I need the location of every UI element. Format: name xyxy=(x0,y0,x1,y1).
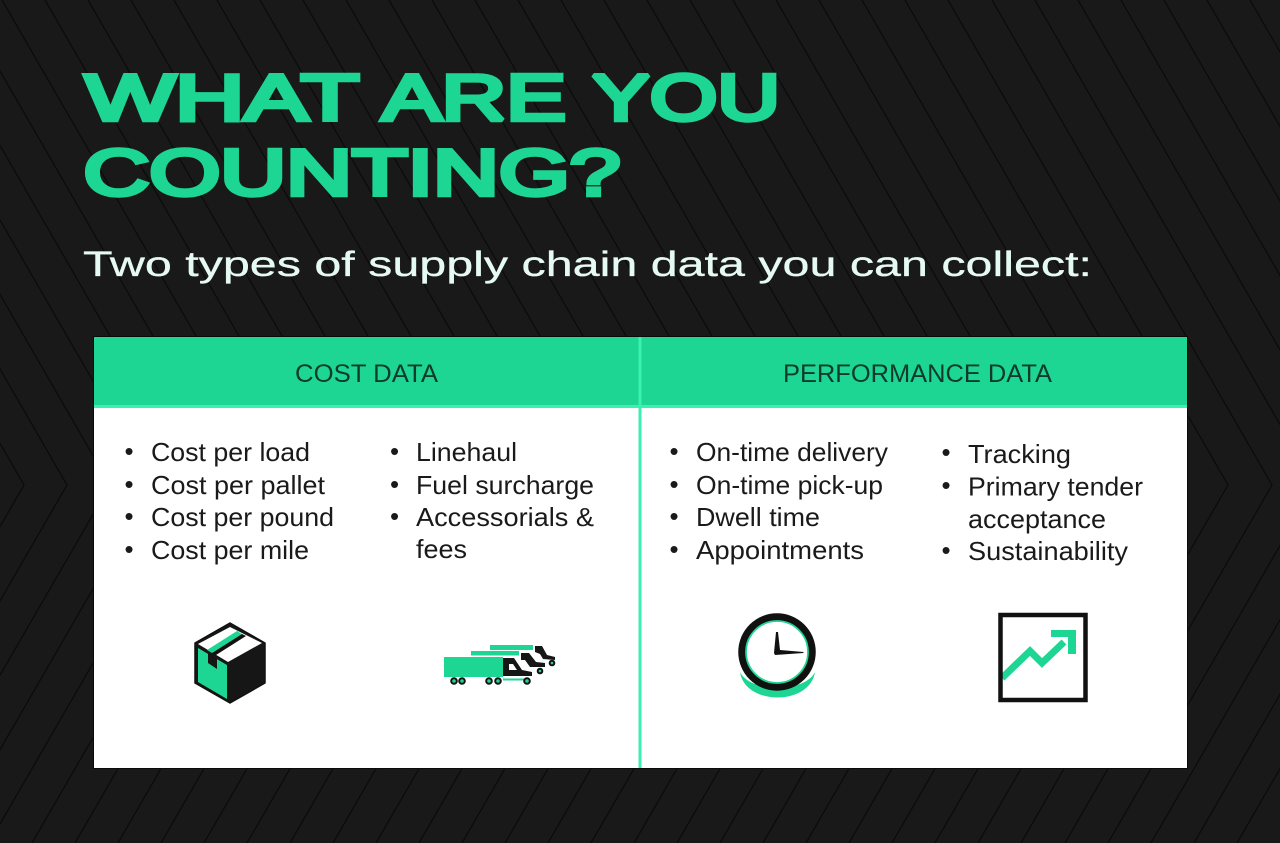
icon: growth chart xyxy=(1000,615,1086,700)
title xyxy=(84,62,780,209)
panel: performance data xyxy=(670,360,1143,700)
list: operational metrics: Tracking xyxy=(968,439,1071,469)
list: cost categories: Fuel surcharge xyxy=(416,470,594,500)
icon: box xyxy=(195,623,265,703)
subtitle: Two types of supply chain data you can collect: xyxy=(83,245,1092,284)
list: cost categories: Linehaul xyxy=(416,437,517,467)
list: operational metrics: • xyxy=(942,437,951,467)
list: service metrics: On-time pick-up xyxy=(696,470,883,500)
list: cost per unit: • xyxy=(124,534,134,564)
icon: trucks xyxy=(444,645,555,684)
list: cost categories: fees xyxy=(416,534,467,564)
list: cost categories: Accessorials & xyxy=(416,502,594,532)
list: service metrics: On-time delivery xyxy=(696,437,888,467)
list: service metrics: • xyxy=(670,436,679,466)
list: cost categories: • xyxy=(390,501,399,531)
list: cost categories: • xyxy=(390,436,399,466)
list: service metrics xyxy=(670,436,888,565)
list: cost per unit: • xyxy=(124,501,134,531)
title: YOU xyxy=(592,62,780,134)
list: cost per unit: Cost per mile xyxy=(151,535,309,565)
list: operational metrics: acceptance xyxy=(968,504,1106,534)
list: service metrics: • xyxy=(670,469,679,499)
icon: clock xyxy=(740,617,815,698)
list: service metrics: • xyxy=(670,501,679,531)
list: service metrics: Dwell time xyxy=(696,502,820,532)
list: operational metrics: • xyxy=(942,470,951,500)
panel: data table xyxy=(93,336,1188,769)
list: cost per unit: Cost per load xyxy=(151,437,310,467)
list: cost per unit xyxy=(124,436,334,565)
list: service metrics: Appointments xyxy=(696,535,864,565)
list: cost per unit: • xyxy=(124,469,134,499)
list: cost per unit: Cost per pound xyxy=(151,502,334,532)
heading: performance data: PERFORMANCE DATA xyxy=(783,360,1052,388)
list: cost per unit: Cost per pallet xyxy=(151,470,326,500)
title: ARE xyxy=(382,62,566,134)
title: COUNTING? xyxy=(84,137,620,209)
heading: cost data: COST DATA xyxy=(295,360,438,388)
list: cost categories xyxy=(390,436,594,564)
title: WHAT xyxy=(85,62,359,134)
panel: cost data xyxy=(124,360,594,703)
list: operational metrics: • xyxy=(942,535,951,565)
list: cost per unit: • xyxy=(124,436,134,466)
list: operational metrics: Sustainability xyxy=(968,536,1128,566)
list: operational metrics: Primary tender xyxy=(968,472,1143,502)
list: service metrics: • xyxy=(670,534,679,564)
list: cost categories: • xyxy=(390,469,399,499)
list: operational metrics xyxy=(942,437,1143,566)
